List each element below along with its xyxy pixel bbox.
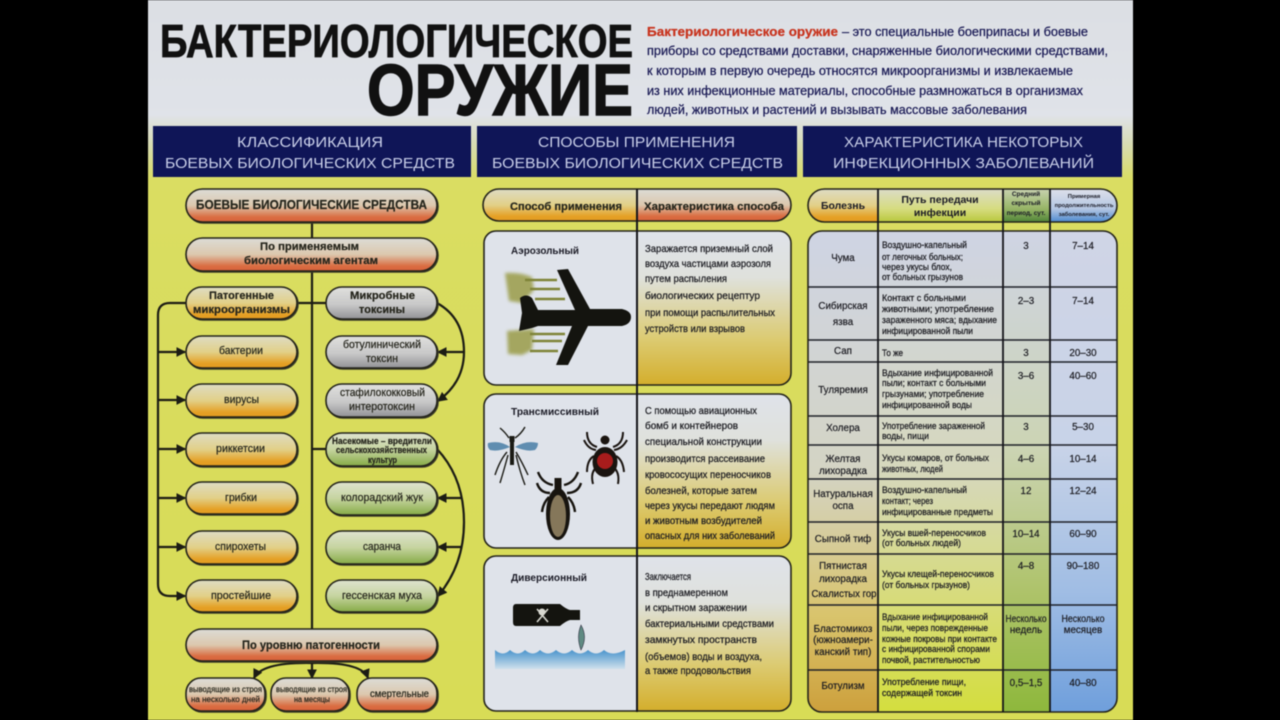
box: colorado beetle: колорадский жук (341, 492, 423, 504)
transmission routes: Контакт с больными (882, 293, 966, 304)
illness duration values: 10–14 (1069, 454, 1097, 465)
column heading: classification: БОЕВЫХ БИОЛОГИЧЕСКИХ СРЕДСТВ (165, 155, 455, 172)
transmission routes: Вдыхание инфицированной (882, 612, 988, 623)
latent period values: 3 (1023, 241, 1029, 252)
icon: louse (537, 472, 581, 540)
icon: poison bottle (513, 604, 580, 626)
row: transmissive (484, 394, 791, 548)
box: fungi: грибки (225, 492, 257, 504)
transmission routes: Воздушно-капельный (882, 485, 967, 496)
latent period values: 3 (1023, 348, 1029, 359)
illness duration values: 7–14 (1072, 296, 1094, 307)
box: crop pests: сельскохозяйственных (336, 445, 427, 455)
latent period values (1006, 241, 1047, 689)
row: sabotage (484, 556, 791, 711)
table header (808, 189, 1117, 222)
disease names: (южноамери- (813, 635, 873, 646)
table header: скрытый (1011, 199, 1041, 207)
box: colorado beetle (326, 482, 437, 515)
table header: продолжительность (1055, 203, 1114, 209)
box: disabling for days: на несколько дней (191, 695, 260, 704)
row: transmissive: через укусы передают людям (645, 500, 775, 512)
transmission routes: пыли, через поврежденные (882, 623, 988, 634)
row: aerosol: биологических рецептур (645, 290, 760, 302)
intro definition text: людей, животных и растений и вызывать массовые заболевания (647, 102, 1027, 117)
transmission routes: от больных грызунов (882, 272, 963, 283)
disease names: лихорадка (819, 574, 868, 585)
disease names: Ботулизм (821, 681, 865, 692)
intro definition text: к которым в первую очередь относятся микроорганизмы и извлекаемые (647, 63, 1073, 78)
disease names: Сыпной тиф (815, 534, 871, 545)
transmission routes: инфицированные предметы (882, 507, 993, 518)
latent period values: Несколько (1006, 614, 1047, 625)
box: hessian fly: гессенская муха (342, 590, 423, 602)
transmission routes: пыли; контакт с больными (882, 378, 986, 389)
table body background (808, 231, 1117, 712)
transmission routes: (от больных грызунов) (882, 580, 970, 591)
box: disabling for months: на месяцы (294, 695, 330, 704)
illness duration values: Несколько (1062, 614, 1105, 625)
column heading: diseases: ХАРАКТЕРИСТИКА НЕКОТОРЫХ (844, 134, 1083, 151)
box: staphylococcal enterotoxin: интеротоксин (349, 401, 415, 413)
transmission routes: То же (882, 348, 903, 359)
row: transmissive: опасных для них заболеваний (645, 530, 775, 542)
column heading: classification (153, 126, 471, 177)
intro definition text: – это специальные боеприпасы и боевые (842, 24, 1088, 39)
row: aerosol: при помощи распылительных (645, 307, 776, 319)
row: aerosol: устройств или взрывов (645, 323, 745, 335)
disease names: Бластомикоз (814, 624, 873, 635)
transmission routes: с инфицированной спорами (882, 644, 990, 655)
disease names (812, 253, 877, 692)
row: aerosol: Заражается приземный слой (645, 243, 773, 255)
box: lethal: смертельные (370, 689, 429, 700)
row: sabotage: (объемов) воды и воздуха, (645, 651, 762, 663)
transmission routes: Воздушно-капельный (882, 240, 967, 251)
latent period values: 10–14 (1012, 529, 1040, 540)
table header: Примерная (1068, 194, 1100, 200)
illness duration values: 12–24 (1069, 486, 1097, 497)
column heading: methods: СПОСОБЫ ПРИМЕНЕНИЯ (538, 134, 735, 151)
box: bacteria (186, 336, 297, 368)
box: disabling for months (271, 678, 349, 711)
row: transmissive: специальной конструкции (645, 436, 762, 448)
column heading: diseases (803, 126, 1122, 177)
disease names: Сибирская (818, 301, 868, 312)
box: microbial toxins: токсины (359, 304, 405, 316)
page background (148, 0, 1133, 720)
box: by pathogenicity: По уровню патогенности (242, 638, 380, 652)
box: by agents applied: По применяемым (260, 241, 359, 253)
box: botulinum toxin (326, 336, 437, 368)
icon: poison drop (578, 625, 584, 650)
panel: disease table (808, 189, 1117, 712)
box: pathogens: Патогенные (209, 290, 274, 302)
illness duration values: 40–60 (1069, 371, 1097, 382)
box: botulinum toxin: токсин (366, 353, 398, 365)
disease names: оспа (832, 501, 854, 512)
box: spirochetes: спирохеты (215, 541, 266, 553)
box: viruses: вирусы (224, 394, 259, 406)
row: aerosol: воздуха частицами аэрозоля (645, 258, 771, 270)
icon: water waves (495, 650, 625, 669)
transmission routes: через укусы блох, (882, 262, 952, 273)
icon: airplane spraying aerosol (505, 269, 631, 365)
transmission routes: от легочных больных; (882, 252, 963, 263)
box: crop pests: Насекомые – вредители (332, 436, 432, 446)
disease names: язва (833, 317, 854, 328)
disease names: Пятнистая (819, 561, 867, 572)
row: transmissive: и животным возбудителей (645, 515, 762, 527)
row: sabotage: замкнутых пространств (645, 634, 757, 646)
box: locust: саранча (363, 541, 402, 553)
table header: Путь передачи (901, 194, 979, 206)
transmission routes: Укусы вшей-переносчиков (882, 528, 986, 539)
disease names: лихорадка (819, 466, 868, 477)
transmission routes: кожные покровы при контакте (882, 634, 997, 645)
panel: classification flowchart (158, 189, 464, 711)
row: aerosol: путем распыления (645, 273, 727, 285)
box: combat biological agents: БОЕВЫЕ БИОЛОГИЧЕСКИЕ СРЕДСТВА (196, 197, 428, 212)
latent period values: 12 (1021, 486, 1031, 497)
illness duration values: 60–90 (1069, 529, 1097, 540)
box: staphylococcal enterotoxin (326, 384, 437, 417)
disease names: Туляремия (818, 385, 868, 396)
transmission routes: (от больных людей) (882, 538, 961, 549)
latent period values: 4–8 (1018, 561, 1035, 572)
illness duration values: 90–180 (1067, 561, 1100, 572)
box: botulinum toxin: ботулинический (343, 339, 421, 351)
transmission routes: животных, людей (882, 464, 943, 475)
row: sabotage: в преднамеренном (645, 587, 728, 599)
panel: application methods (483, 189, 791, 712)
transmission routes: Употребление зараженной (882, 421, 985, 432)
latent period values: 3 (1023, 422, 1029, 433)
row: aerosol (484, 231, 791, 385)
row: sabotage: а также продовольствия (645, 665, 751, 677)
illness duration values: 40–80 (1069, 678, 1097, 689)
intro definition text: приборы со средствами доставки, снаряженные биологическими средствами, (647, 43, 1108, 58)
box: spirochetes (186, 531, 297, 564)
box: protozoa (186, 580, 297, 612)
box: by agents applied (186, 238, 437, 271)
illness duration values: 5–30 (1072, 422, 1094, 433)
box: lethal (357, 678, 437, 711)
title: БАКТЕРИОЛОГИЧЕСКОЕ (160, 15, 633, 67)
box: disabling for months: выводящие из строя (276, 685, 347, 694)
box: crop pests: культур (368, 455, 397, 465)
row: aerosol: Аэрозольный (511, 245, 579, 257)
table header: Средний (1012, 190, 1040, 198)
box: microbial toxins: Микробные (350, 290, 415, 302)
column heading: methods (477, 126, 797, 177)
box: locust (326, 531, 437, 564)
latent period values: 3–6 (1018, 371, 1035, 382)
box: microbial toxins (326, 287, 437, 319)
transmission routes: зараженного мяса; вдыхание (882, 315, 997, 326)
row: sabotage: Диверсионный (511, 572, 587, 584)
transmission routes (882, 240, 997, 699)
box: pathogens: микроорганизмы (193, 304, 290, 316)
box: rickettsia: риккетсии (216, 443, 265, 455)
transmission routes: воды, пищи (882, 431, 929, 442)
box: combat biological agents (186, 189, 437, 222)
row: sabotage: Заключается (645, 571, 691, 583)
disease names: Натуральная (813, 489, 873, 500)
disease names: Холера (826, 423, 860, 434)
box: pathogens (186, 287, 297, 319)
transmission routes: почвой, растительностью (882, 655, 980, 666)
transmission routes: грызунами; употребление (882, 389, 984, 400)
illness duration values: 20–30 (1069, 348, 1097, 359)
table header: Болезнь (821, 200, 866, 212)
transmission routes: Употребление пищи, (882, 677, 966, 688)
latent period values: 2–3 (1018, 296, 1035, 307)
latent period values: 4–6 (1018, 454, 1035, 465)
intro definition text: из них инфекционные материалы, способные размножаться в организмах (647, 83, 1083, 98)
column heading: diseases: ИНФЕКЦИОННЫХ ЗАБОЛЕВАНИЙ (833, 154, 1094, 172)
transmission routes: Вдыхание инфицированной (882, 368, 993, 379)
title: ОРУЖИЕ (367, 51, 633, 131)
illness duration values: 7–14 (1072, 241, 1094, 252)
table header: инфекции (914, 207, 966, 219)
intro definition text (647, 24, 1108, 117)
box: hessian fly (326, 580, 437, 612)
row: sabotage: и скрытном заражении (645, 602, 747, 614)
table header: период, сут. (1007, 210, 1046, 217)
icon: mosquito (488, 427, 538, 485)
row: transmissive: С помощью авиационных (645, 405, 758, 417)
box: viruses (186, 384, 297, 417)
row: transmissive: кровососущих переносчиков (645, 469, 771, 481)
box: disabling for days: выводящие из строя (189, 685, 262, 694)
box: staphylococcal enterotoxin: стафилококковый (340, 387, 425, 399)
title (160, 15, 633, 131)
row: transmissive: производится рассеивание (645, 453, 765, 465)
box: protozoa: простейшие (211, 590, 271, 602)
disease names: канский тип) (815, 647, 871, 658)
box: by pathogenicity (186, 629, 437, 661)
transmission routes: животными; употребление (882, 304, 994, 315)
transmission routes: инфицированной воды (882, 400, 972, 411)
row: transmissive: бомб и контейнеров (645, 420, 738, 432)
latent period values: 0,5–1,5 (1010, 678, 1043, 689)
transmission routes: Укусы комаров, от больных (882, 453, 989, 464)
row: sabotage: бактериальными средствами (645, 618, 774, 630)
table header: Характеристика способа (644, 201, 785, 213)
disease names: Скалистых гор (812, 589, 877, 600)
table header: Способ применения (510, 201, 622, 213)
illness duration values (1062, 241, 1105, 689)
illness duration values: месяцев (1064, 625, 1102, 636)
icon: tick (584, 432, 627, 484)
disease names: Сап (834, 346, 852, 357)
transmission routes: инфицированной пыли (882, 326, 973, 337)
row: transmissive: Трансмиссивный (511, 406, 599, 418)
connector lines and arrows (158, 221, 464, 678)
transmission routes: контакт; через (882, 496, 933, 507)
box: bacteria: бактерии (219, 345, 263, 357)
box: rickettsia (186, 433, 297, 466)
column heading: classification: КЛАССИФИКАЦИЯ (237, 134, 383, 151)
transmission routes: содержащей токсин (882, 688, 962, 699)
disease names: Чума (831, 253, 855, 264)
table header (483, 189, 791, 221)
table header: заболевания, сут. (1059, 211, 1110, 218)
latent period values: недель (1010, 625, 1042, 636)
box: fungi (186, 482, 297, 514)
row: transmissive: болезней, которые затем (645, 485, 757, 497)
column divider (636, 189, 638, 712)
disease names: Желтая (826, 454, 860, 465)
transmission routes: Укусы клещей-переносчиков (882, 569, 994, 580)
box: by agents applied: биологическим агентам (244, 255, 378, 267)
intro definition text: Бактериологическое оружие (647, 24, 838, 39)
column heading: methods: БОЕВЫХ БИОЛОГИЧЕСКИХ СРЕДСТВ (492, 155, 783, 172)
column dividers (878, 189, 1050, 712)
box: crop pests (326, 433, 437, 466)
box: disabling for days (186, 678, 265, 711)
